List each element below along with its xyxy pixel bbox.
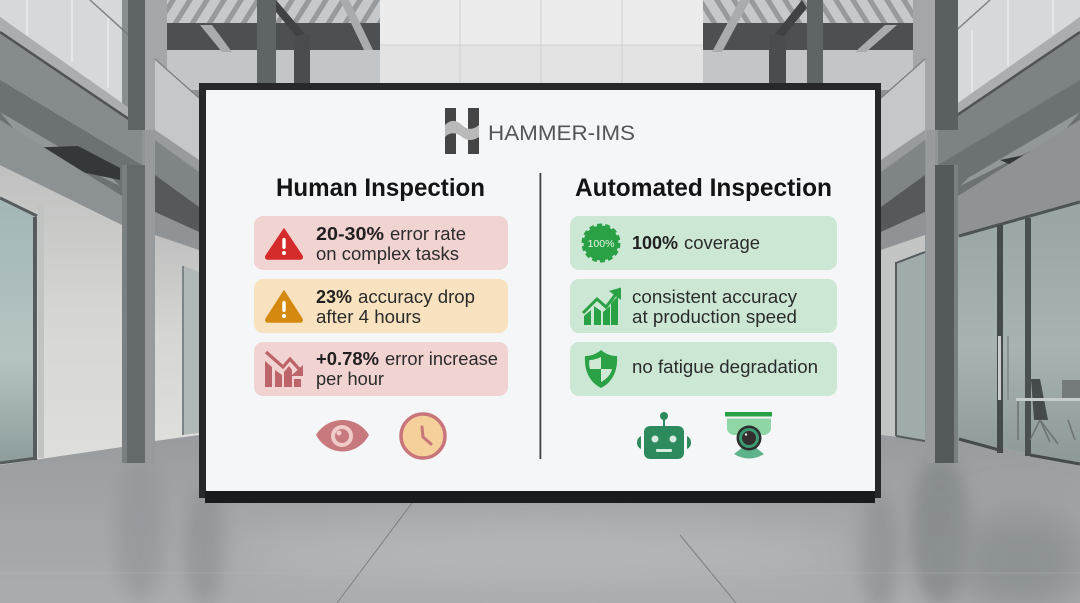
heading: automated inspection: Automated Inspection — [575, 174, 832, 202]
right column — [935, 0, 958, 130]
icon: red warning triangle — [266, 229, 302, 259]
stat: consistent accuracy — [570, 279, 837, 333]
stat: error rate: error rate — [390, 224, 466, 244]
stat: error rate: 20-30% — [316, 224, 384, 244]
display board frame — [199, 83, 881, 503]
heading: human inspection: Human Inspection — [276, 174, 485, 202]
floor — [0, 430, 1080, 603]
chair and table — [1016, 379, 1080, 444]
stat: error rate: on complex tasks — [316, 244, 459, 264]
stat: accuracy drop: 23% — [316, 287, 352, 307]
icon: camera — [725, 412, 772, 458]
stat: coverage: 100% — [632, 233, 678, 253]
stat: error increase: +0.78% — [316, 349, 379, 369]
left column — [128, 0, 145, 130]
stat: coverage — [570, 216, 837, 270]
stat: accuracy drop: after 4 hours — [316, 307, 421, 327]
stat: error increase: error increase — [385, 349, 498, 369]
stat: accuracy drop — [254, 279, 508, 333]
left side architecture — [0, 0, 199, 465]
icon: 100% badge — [583, 225, 619, 261]
stat: consistent accuracy: consistent accuracy — [632, 287, 797, 307]
stat: no fatigue: no fatigue degradation — [632, 357, 818, 377]
screen panel — [206, 90, 875, 491]
stat: accuracy drop: accuracy drop — [358, 287, 475, 307]
center wall tiles — [380, 0, 703, 90]
icon: falling chart — [265, 352, 303, 387]
right side architecture — [881, 0, 1080, 464]
stat: error rate — [254, 216, 508, 270]
right side bay — [881, 59, 925, 160]
side bay — [155, 59, 199, 160]
stat: coverage: coverage — [684, 233, 760, 253]
panel: automated inspection — [570, 174, 837, 459]
stat: error increase — [254, 342, 508, 396]
ceiling and back wall — [160, 0, 920, 90]
panel: human inspection — [254, 174, 508, 458]
stat: no fatigue — [570, 342, 837, 396]
logo: HAMMER-IMS — [445, 108, 635, 154]
divider — [540, 173, 541, 459]
stat: consistent accuracy: at production speed — [632, 307, 797, 327]
icon: H mark — [445, 108, 479, 154]
icon: shield — [585, 350, 617, 388]
icon: robot — [637, 412, 691, 459]
icon: 100% badge: 100% — [588, 238, 614, 250]
icon: rising chart — [583, 288, 621, 325]
logo: HAMMER-IMS: HAMMER-IMS — [488, 122, 635, 145]
icon: clock — [401, 414, 445, 458]
icon: eye — [316, 420, 369, 452]
stat: error increase: per hour — [316, 369, 384, 389]
icon: amber warning triangle — [266, 291, 302, 322]
